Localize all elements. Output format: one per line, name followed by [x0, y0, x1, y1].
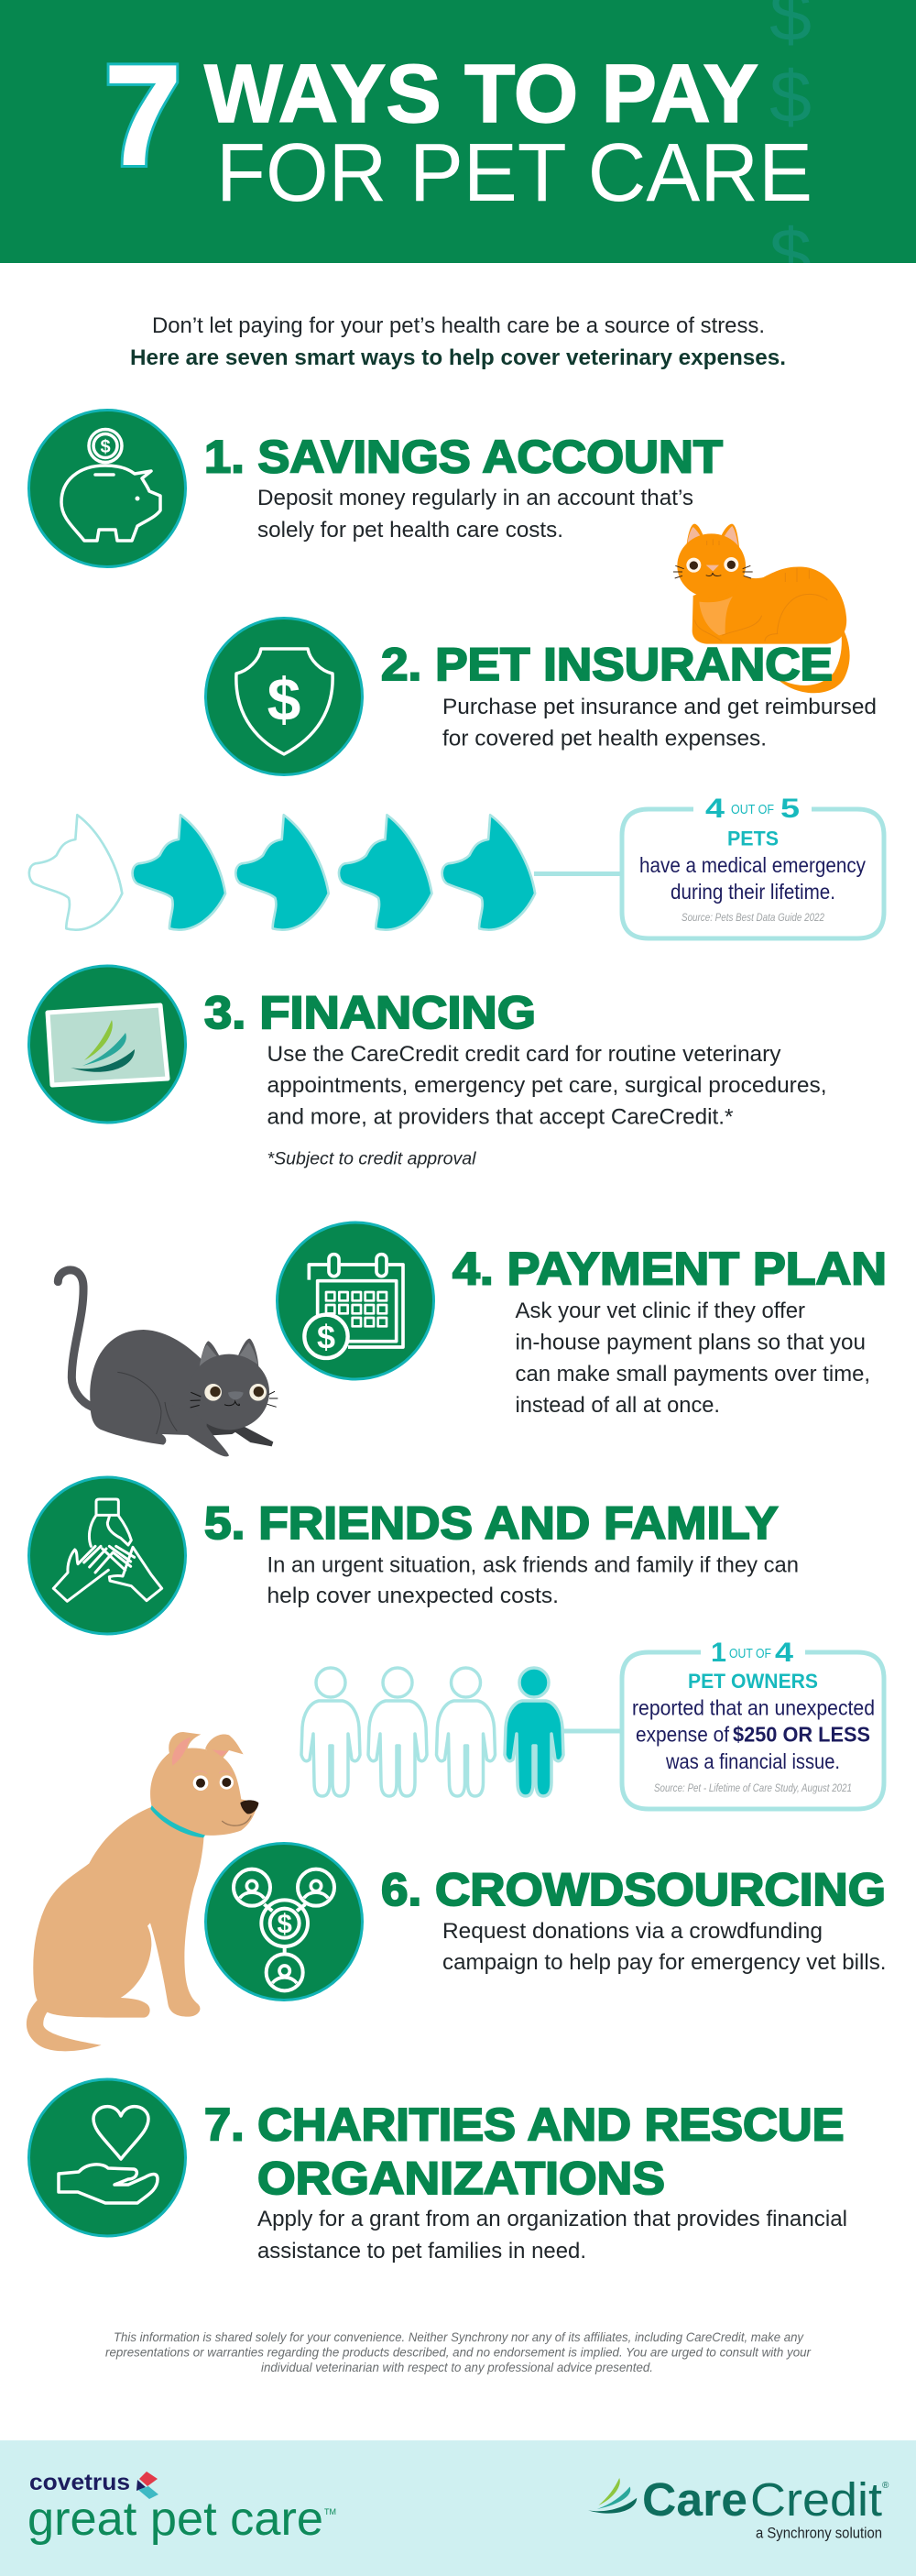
illustration: grey cat — [58, 1270, 278, 1456]
callout box: PET OWNERS — [688, 1670, 818, 1693]
title line 1: WAYS TO PAY — [204, 49, 758, 140]
callout box: expense of — [636, 1723, 730, 1747]
logo: CareCredit: Credit — [750, 2473, 882, 2526]
callout box: 1 — [711, 1638, 726, 1668]
decorative dollar signs — [770, 0, 810, 263]
decorative dollar signs: $ — [769, 214, 812, 295]
heading 7: 7. CHARITIES AND RESCUE — [204, 2099, 845, 2150]
description 5: help cover unexpected costs. — [267, 1584, 559, 1608]
heading 3: 3. FINANCING — [204, 987, 536, 1038]
callout box — [622, 794, 884, 938]
description 5 — [267, 1552, 799, 1608]
connector line — [534, 871, 621, 876]
icon: donation network: $ — [278, 1909, 292, 1939]
section 2: pet insurance — [205, 618, 877, 775]
description 2: for covered pet health expenses. — [442, 726, 767, 751]
icon: credit card — [29, 966, 185, 1123]
section 4: payment plan — [277, 1222, 887, 1418]
description 2 — [442, 695, 877, 751]
callout box: have a medical emergency — [639, 853, 866, 877]
logo: covetrus great pet care: TM — [324, 2507, 336, 2516]
icon row: pet heads — [29, 815, 535, 930]
description 7: Apply for a grant from an organization that provides financial — [257, 2207, 847, 2231]
icon: heart in hand — [29, 2079, 185, 2236]
icon: calendar and coin: $ — [317, 1318, 335, 1355]
logo: CareCredit: Care — [642, 2473, 747, 2526]
section 1: savings account — [29, 411, 723, 566]
stat graphic: 1 of 4 pet owners — [301, 1638, 884, 1809]
description 3 — [267, 1042, 826, 1169]
disclaimer: individual veterinarian with respect to any professional advice presented. — [261, 2360, 653, 2374]
description 4: Ask your vet clinic if they offer — [515, 1299, 805, 1323]
title numeral 7: 7 — [104, 36, 181, 194]
heading 7 — [204, 2099, 845, 2204]
callout box: OUT OF — [729, 1646, 771, 1661]
description 4: instead of all at once. — [515, 1393, 720, 1418]
description 6: campaign to help pay for emergency vet bills. — [442, 1950, 887, 1975]
icon: shield — [205, 618, 363, 775]
description 5: In an urgent situation, ask friends and family if they can — [267, 1552, 799, 1578]
description 3: and more, at providers that accept CareCredit.* — [267, 1105, 734, 1129]
logo: covetrus great pet care: covetrus — [29, 2470, 130, 2495]
title — [104, 36, 812, 219]
description 1: Deposit money regularly in an account that’s — [257, 486, 693, 510]
description 2: Purchase pet insurance and get reimbursed — [442, 695, 877, 719]
description 4 — [515, 1299, 870, 1418]
heading 2: 2. PET INSURANCE — [381, 639, 833, 690]
callout box: 4 — [775, 1638, 793, 1668]
description 3: Use the CareCredit credit card for routine veterinary — [267, 1042, 781, 1067]
logo: CareCredit: a Synchrony solution — [756, 2524, 882, 2542]
heading 6: 6. CROWDSOURCING — [381, 1864, 886, 1915]
decorative dollar signs: $ — [769, 56, 812, 137]
callout box: was a financial issue. — [665, 1749, 840, 1773]
icon: shield: $ — [267, 665, 300, 733]
section 7: charities and rescue organizations — [29, 2079, 847, 2264]
description 4: in-house payment plans so that you — [515, 1331, 866, 1354]
logo: CareCredit — [588, 2473, 889, 2542]
description 4: can make small payments over time, — [515, 1362, 870, 1387]
description 1: solely for pet health care costs. — [257, 518, 563, 543]
section 3: financing — [29, 966, 826, 1169]
disclaimer: representations or warranties regarding the products described, and no endorsement is implied. You are urged to consult with your — [105, 2344, 812, 2359]
intro text: Don’t let paying for your pet’s health care be a source of stress. — [152, 313, 765, 338]
disclaimer — [105, 2329, 812, 2374]
intro text — [130, 313, 786, 370]
description 6 — [442, 1919, 887, 1975]
description 7: assistance to pet families in need. — [257, 2239, 586, 2264]
heading 4: 4. PAYMENT PLAN — [453, 1243, 887, 1294]
connector line — [562, 1728, 621, 1734]
icon: piggy bank: $ — [100, 437, 111, 457]
callout box: OUT OF — [731, 802, 774, 817]
illustration: tan dog — [27, 1732, 258, 2051]
description 3: appointments, emergency pet care, surgical procedures, — [267, 1073, 826, 1098]
description 7 — [257, 2207, 847, 2264]
callout box — [622, 1638, 884, 1809]
callout box: 4 — [705, 794, 725, 824]
title line 2: FOR PET CARE — [216, 127, 812, 219]
icon: donation network — [205, 1844, 363, 2000]
disclaimer: This information is shared solely for your convenience. Neither Synchrony nor any of its affiliates, including CareCredit, make any — [114, 2329, 804, 2344]
title numeral 7: 7 — [104, 36, 181, 194]
stat graphic: 4 of 5 pets — [29, 794, 884, 938]
callout box: $250 OR LESS — [733, 1723, 870, 1747]
description 6: Request donations via a crowdfunding — [442, 1919, 823, 1944]
description 1 — [257, 486, 693, 543]
callout box: PETS — [727, 827, 779, 850]
intro text: Here are seven smart ways to help cover veterinary expenses. — [130, 345, 786, 370]
logo: covetrus great pet care — [27, 2470, 336, 2546]
icon: joined hands — [29, 1477, 185, 1634]
icon row: people — [301, 1668, 563, 1796]
description 3: *Subject to credit approval — [267, 1149, 476, 1169]
logo: CareCredit: ® — [882, 2481, 889, 2491]
icon: piggy bank — [29, 411, 185, 566]
logo: covetrus great pet care: great pet care — [27, 2493, 323, 2546]
icon: calendar and coin — [277, 1222, 434, 1379]
callout box: Source: Pets Best Data Guide 2022 — [682, 911, 824, 924]
heading 7: ORGANIZATIONS — [257, 2153, 665, 2204]
section 6: crowdsourcing — [205, 1844, 887, 2000]
heading 5: 5. FRIENDS AND FAMILY — [204, 1497, 779, 1549]
illustration: orange cat — [673, 524, 850, 693]
callout box: Source: Pet - Lifetime of Care Study, August 2021 — [654, 1781, 852, 1794]
section 5: friends and family — [29, 1477, 799, 1634]
header banner — [0, 0, 916, 263]
callout box: during their lifetime. — [671, 880, 835, 904]
heading 1: 1. SAVINGS ACCOUNT — [204, 431, 723, 482]
callout box: reported that an unexpected — [632, 1695, 875, 1719]
footer band — [0, 2440, 916, 2576]
callout box: 5 — [780, 794, 800, 824]
